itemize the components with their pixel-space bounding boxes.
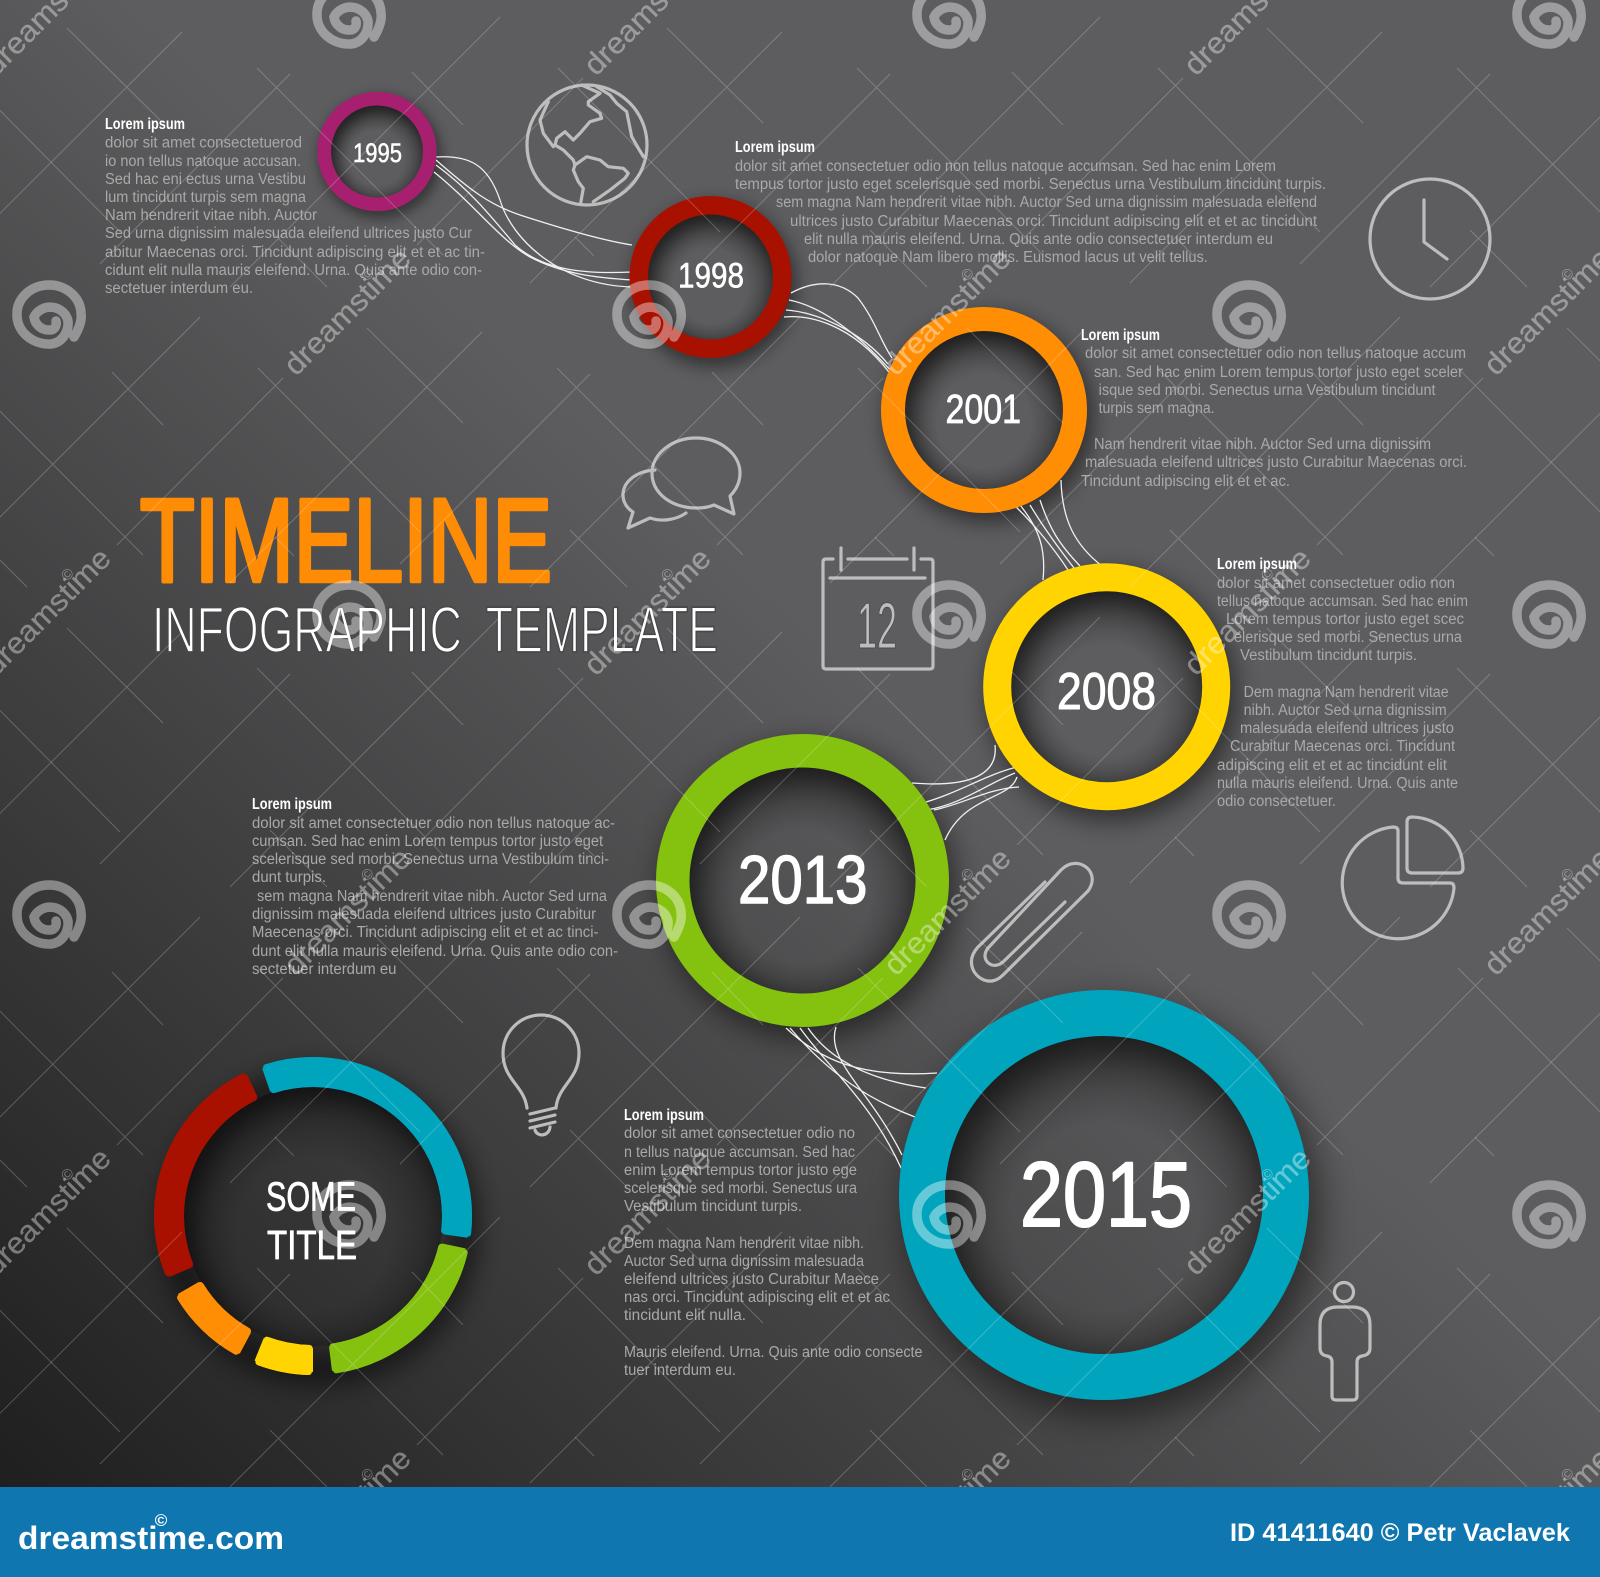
text block: 2001: Tincidunt adipiscing elit et et ac. (1081, 473, 1290, 490)
text block: 2008: Lorem tempus tortor justo eget scec (1226, 611, 1464, 628)
text block: 2015 (624, 1107, 922, 1379)
text block: 2015: dolor sit amet consectetuer odio no (624, 1125, 855, 1142)
watermark wordmarks: © (358, 1465, 378, 1485)
icon: calendar: 12 (857, 589, 897, 662)
text block: 1995: Nam hendrerit vitae nibh. Auctor (105, 207, 317, 224)
text block: 2001: turpis sem magna. (1099, 400, 1215, 417)
ring (997, 577, 1216, 796)
watermark wordmarks: dreamstime (1178, 1142, 1318, 1282)
icon: light bulb (503, 1015, 579, 1135)
ring (639, 205, 782, 349)
watermark wordmarks: © (1258, 1165, 1278, 1185)
text block: 2001: isque sed morbi. Senectus urna Vestibulum tincidunt (1099, 382, 1436, 399)
segmented donut with some title (100, 1003, 526, 1429)
watermark wordmarks: © (358, 865, 378, 885)
watermark wordmarks: © (1258, 565, 1278, 585)
image id and credit: ID 41411640 © Petr Vaclavek (1230, 1519, 1570, 1547)
icon: speech bubbles (623, 438, 740, 528)
timeline node 2015 (922, 1013, 1286, 1377)
watermark wordmarks: © (1558, 865, 1578, 885)
text block: 1995: cidunt elit nulla mauris eleifend. Urna. Quis ante odio con- (105, 262, 482, 279)
timeline node 2013 (673, 751, 932, 1010)
watermark wordmarks: © (1558, 265, 1578, 285)
text block: 1998 (735, 139, 1326, 266)
text block: 2015: eleifend ultrices justo Curabitur Maece (624, 1271, 879, 1288)
text block: 1998: dolor sit amet consectetuer odio non tellus natoque accumsan. Sed hac enim Lorem (735, 158, 1276, 175)
text block: 2015: Dem magna Nam hendrerit vitae nibh. (624, 1235, 864, 1252)
text block: 2008: nibh. Auctor Sed urna dignissim (1244, 702, 1447, 719)
icon: person (1320, 1282, 1370, 1400)
text block: 1998: sem magna Nam hendrerit vitae nibh. Auctor Sed urna dignissim malesuada eleifend (776, 194, 1317, 211)
text block: 2015: tuer interdum eu. (624, 1362, 736, 1379)
title: TIMELINE: TIMELINE (140, 475, 552, 607)
text block: 2015: nas orci. Tincidunt adipiscing elit et et ac (624, 1289, 890, 1306)
text block: 2013: dunt elit nulla mauris eleifend. Urna. Quis ante odio con- (252, 943, 618, 960)
text block: 2008: tellus natoque accumsan. Sed hac enim (1217, 593, 1468, 610)
icon: calendar (823, 548, 933, 669)
donut segment: red (111, 1014, 515, 1418)
logo wordmark: dreamstime.com (18, 1520, 284, 1556)
icon: globe (527, 85, 647, 205)
watermark wordmarks: © (958, 1465, 978, 1485)
text block: 1998: elit nulla mauris eleifend. Urna. Quis ante odio consectetuer interdum eu (804, 231, 1273, 248)
text block: 2013 (252, 796, 618, 978)
text block: 2015: tincidunt elit nulla. (624, 1307, 746, 1324)
text block: 1995: Sed hac eni ectus urna Vestibu (105, 171, 306, 188)
text block: 2015: n tellus natoque accumsan. Sed hac (624, 1144, 855, 1161)
watermark wordmarks: dreamstime (878, 842, 1018, 982)
text block: 2008: dolor sit amet consectetuer odio non (1217, 575, 1455, 592)
text block: 2013: cumsan. Sed hac enim Lorem tempus tortor justo eget (252, 833, 604, 850)
text block: 2008: adipiscing elit et et ac tincidunt elit (1217, 757, 1448, 774)
text block: 1995: lum tincidunt turpis sem magna (105, 189, 306, 206)
watermark wordmarks: dreamstime (578, 542, 718, 682)
watermark wordmarks: dreamstime (578, 1142, 718, 1282)
donut label (266, 1174, 357, 1268)
text block: 2008: odio consectetuer. (1217, 793, 1336, 810)
watermark wordmarks: dreamstime (1178, 542, 1318, 682)
text block: 1998: Lorem ipsum (735, 139, 815, 156)
watermark wordmarks: © (658, 565, 678, 585)
year label: 2008 (1057, 663, 1156, 721)
text block: 2001: Nam hendrerit vitae nibh. Auctor Sed urna dignissim (1094, 436, 1431, 453)
text block: 2001 (1081, 327, 1467, 490)
text block: 2001: Lorem ipsum (1081, 327, 1160, 344)
text block: 2001: dolor sit amet consectetuer odio non tellus natoque accum (1085, 345, 1466, 362)
timeline node 1998 (639, 205, 782, 349)
year label: 2001 (946, 386, 1021, 432)
text block: 2015: Auctor Sed urna dignissim malesuada (624, 1253, 864, 1270)
connector lines: 2001 to 2008 (1014, 480, 1102, 580)
watermark wordmarks: dreamstime (878, 242, 1018, 382)
ring (893, 319, 1075, 501)
donut label: SOME (266, 1174, 356, 1220)
text block: 1995: abitur Maecenas orci. Tincidunt adipiscing elit et et ac tin- (105, 244, 485, 261)
text block: 2015: enim Lorem tempus tortor justo ege (624, 1162, 857, 1179)
ring (324, 99, 430, 204)
text block: 1998: ultrices justo Curabitur Maecenas orci. Tincidunt adipiscing elit et et ac tincidunt (790, 213, 1318, 230)
connector lines: 2008 to 2013 (912, 745, 1019, 840)
text block: 2015: Vestibulum tincidunt turpis. (624, 1198, 802, 1215)
ring drop shadows (176, 104, 1294, 1392)
text block: 1995: sectetuer interdum eu. (105, 280, 253, 297)
watermark wordmarks: © (958, 865, 978, 885)
text block: 2013: Lorem ipsum (252, 796, 332, 813)
text block: 2013: sem magna Nam hendrerit vitae nibh. Auctor Sed urna (257, 888, 607, 905)
icon: paper clip (971, 863, 1092, 981)
text block: 2013: dunt turpis. (252, 869, 326, 886)
text block: 2008: malesuada eleifend ultrices justo (1240, 720, 1454, 737)
donut segment: blue (117, 1020, 509, 1412)
donut segment: yellow (153, 1056, 473, 1376)
text block: 2001: malesuada eleifend ultrices justo Curabitur Maecenas orci. (1085, 454, 1467, 471)
text block: 2001: san. Sed hac enim Lorem tempus tortor justo eget sceler (1094, 364, 1463, 381)
timeline node 2008 (997, 577, 1216, 796)
timeline node 1995 (324, 99, 430, 204)
icon: clock (1370, 179, 1490, 299)
connector lines: 2013 to 2015 (786, 1027, 937, 1170)
text block: 1995: Lorem ipsum (105, 116, 185, 133)
text block: 2008 (1217, 556, 1468, 810)
text block: 1998: dolor natoque Nam libero mollis. Euismod lacus ut velit tellus. (808, 249, 1208, 266)
ring inner shading (183, 104, 1264, 1355)
text block: 1995: Sed urna dignissim malesuada eleifend ultrices justo Cur (105, 225, 472, 242)
text block: 2013: Maecenas orci. Tincidunt adipiscing elit et et ac tinci- (252, 924, 598, 941)
watermark wordmarks: dreamstime (278, 242, 418, 382)
text block: 2008: Lorem ipsum (1217, 556, 1297, 573)
text block: 2015: Mauris eleifend. Urna. Quis ante odio consecte (624, 1344, 922, 1361)
year label: 2015 (1020, 1144, 1192, 1246)
banner background (0, 1487, 1600, 1577)
icon: pie chart (1342, 817, 1463, 939)
text block: 2013: dolor sit amet consectetuer odio non tellus natoque ac- (252, 815, 615, 832)
year label: 1995 (353, 138, 402, 168)
donut segment: green (125, 1028, 501, 1404)
donut segment: orange (100, 1003, 526, 1429)
subtitle: INFOGRAPHIC TEMPLATE: INFOGRAPHIC TEMPLATE (152, 593, 718, 666)
watermark wordmarks: © (58, 1165, 78, 1185)
text block: 2015: scelerisque sed morbi. Senectus ura (624, 1180, 857, 1197)
year label: 2013 (738, 842, 868, 918)
logo wordmark: © (155, 1511, 168, 1530)
text block: 2008: Curabitur Maecenas orci. Tincidunt (1230, 738, 1456, 755)
text block: 1995 (105, 116, 485, 297)
watermark wordmarks: © (58, 565, 78, 585)
text block: 2008: Dem magna Nam hendrerit vitae (1244, 684, 1449, 701)
ring (673, 751, 932, 1010)
text block: 1995: io non tellus natoque accusan. (105, 153, 301, 170)
text block: 2008: Vestibulum tincidunt turpis. (1240, 647, 1417, 664)
text block: 1998: tempus tortor justo eget scelerisque sed morbi. Senectus urna Vestibulum tincidunt turpis. (735, 176, 1326, 193)
text block: 2013: scelerisque sed morbi. Senectus urna Vestibulum tinci- (252, 851, 609, 868)
connector lines: 1998 to 2001 (784, 284, 892, 376)
text block: 1995: dolor sit amet consectetuerod (105, 134, 302, 152)
year label: 1998 (678, 256, 744, 296)
text block: 2008: nulla mauris eleifend. Urna. Quis ante (1217, 775, 1458, 792)
connector lines: 1995 to 1998 (434, 157, 632, 287)
footer banner (0, 1487, 1600, 1577)
text block: 2015: Lorem ipsum (624, 1107, 704, 1124)
watermark wordmarks: © (958, 265, 978, 285)
timeline node 2001 (893, 319, 1075, 501)
donut label: TITLE (267, 1222, 357, 1268)
text block: 2013: sectetuer interdum eu (252, 961, 396, 978)
watermark wordmarks: © (658, 1165, 678, 1185)
watermark wordmarks: dreamstime (278, 842, 418, 982)
ring (922, 1013, 1286, 1377)
watermark wordmarks: © (358, 265, 378, 285)
watermark wordmarks: © (1558, 1465, 1578, 1485)
text block: 2013: dignissim malesuada eleifend ultrices justo Curabitur (252, 906, 596, 923)
text block: 2008: elerisque sed morbi. Senectus urna (1234, 629, 1462, 646)
